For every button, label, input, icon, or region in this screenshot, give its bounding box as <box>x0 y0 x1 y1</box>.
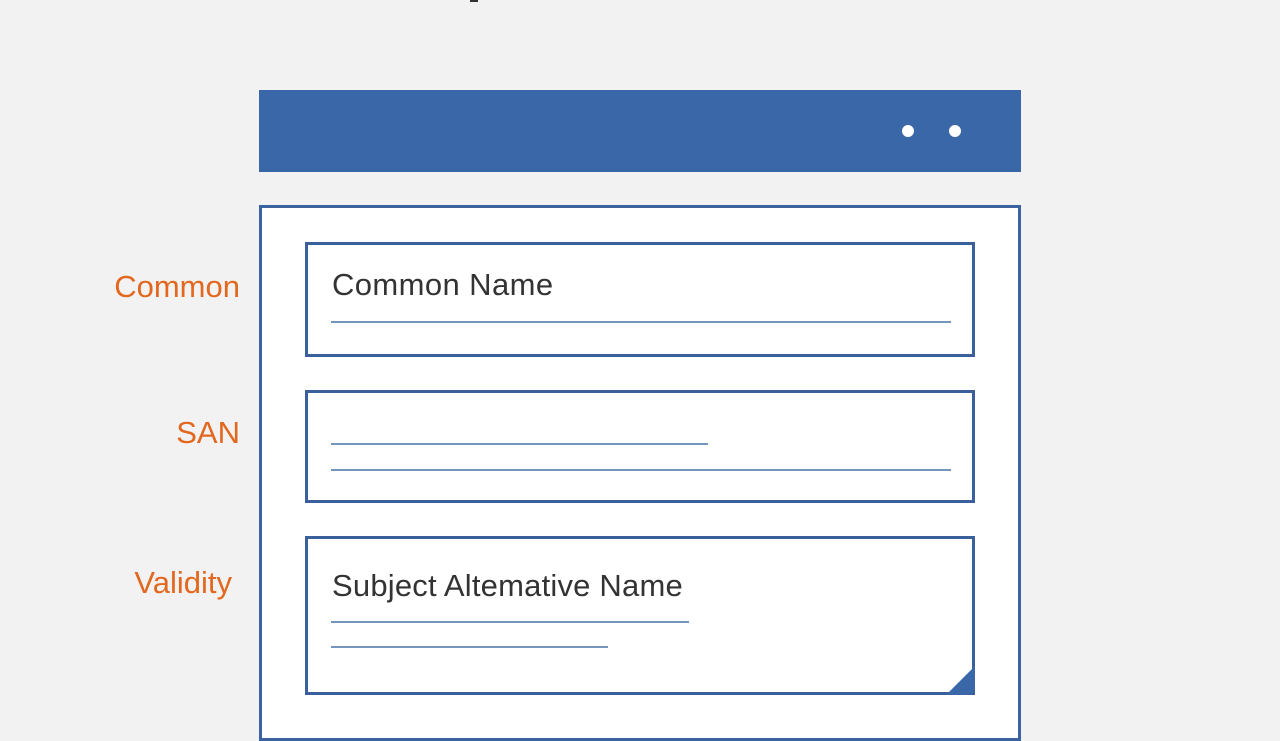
text: Common Name <box>332 267 553 302</box>
box: common name <box>305 242 975 357</box>
label: Validity: Validity <box>134 565 232 600</box>
header bar <box>259 90 1021 172</box>
panel: certificate <box>259 205 1021 741</box>
label: Common: Common <box>114 269 240 304</box>
top fragment <box>470 0 478 2</box>
box: SAN <box>305 390 975 503</box>
icon: page curl <box>946 666 975 695</box>
label: SAN: SAN <box>176 415 240 450</box>
box: validity <box>305 536 975 695</box>
text: Subject Altemative Name <box>332 568 683 603</box>
icon: dots <box>902 125 961 137</box>
